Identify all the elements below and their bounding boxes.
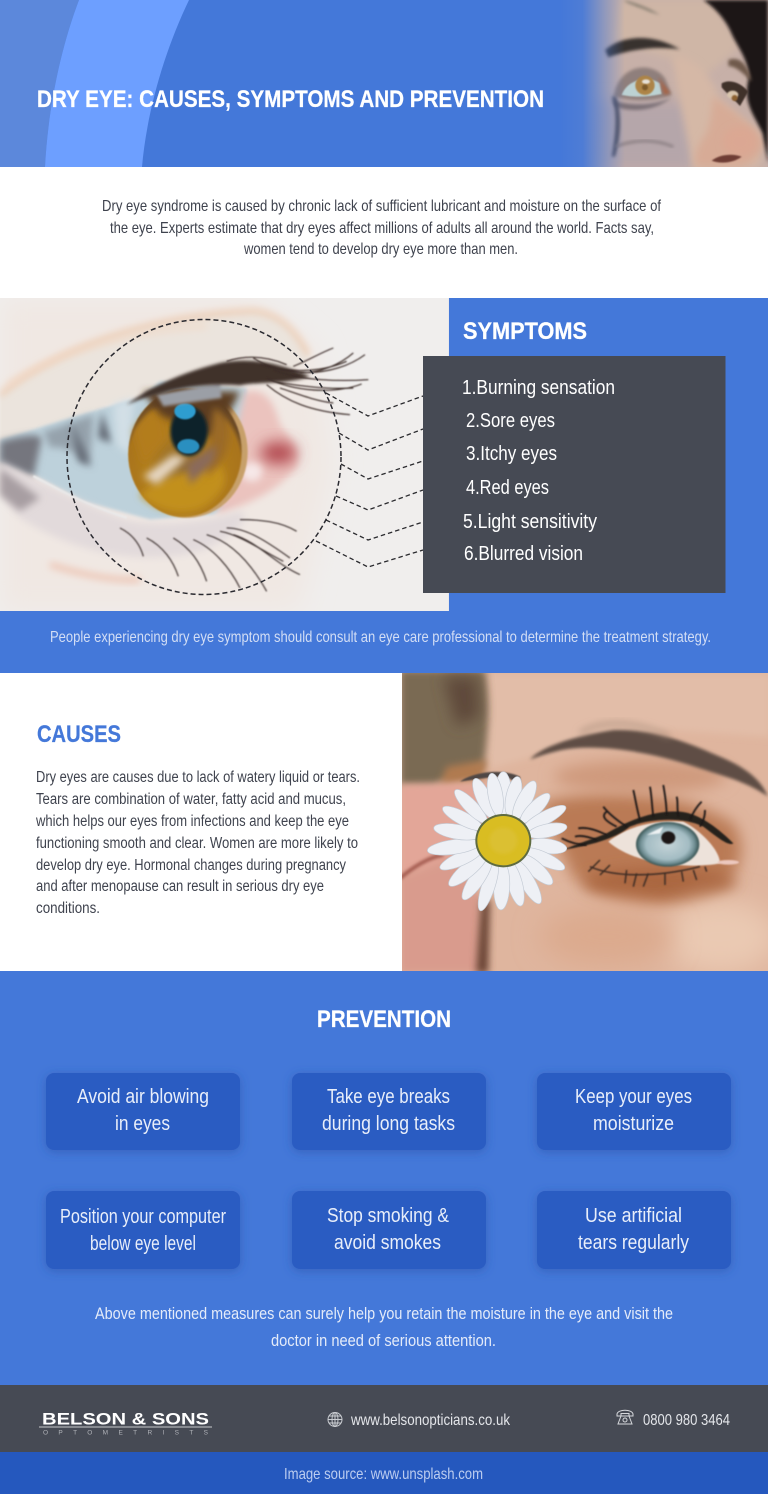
prevention closing note: doctor in need of serious attention. <box>271 1331 496 1350</box>
prevention closing note: Above mentioned measures can surely help you retain the moisture in the eye and visit the <box>95 1304 673 1323</box>
card: stop smoking: Stop smoking & <box>327 1205 450 1227</box>
symptoms list box: 3.Itchy eyes <box>466 443 557 465</box>
causes body text: Tears are combination of water, fatty acid and mucus, <box>36 791 346 808</box>
intro text: Dry eye syndrome is caused by chronic lack of sufficient lubricant and moisture on the surface of <box>102 198 661 215</box>
card: take eye breaks: during long tasks <box>322 1113 455 1135</box>
card: artificial tears <box>537 1191 731 1269</box>
photo: eye with daisy <box>400 670 768 973</box>
causes body text: conditions. <box>36 900 100 917</box>
logo <box>39 1410 212 1436</box>
dashed connectors <box>316 393 423 567</box>
symptoms heading: SYMPTOMS <box>463 318 587 345</box>
card: stop smoking: avoid smokes <box>334 1232 441 1254</box>
eye <box>608 821 720 866</box>
daisy <box>426 772 569 913</box>
causes body text: develop dry eye. Hormonal changes during pregnancy <box>36 857 346 874</box>
intro text: women tend to develop dry eye more than men. <box>243 241 518 258</box>
symptoms list box <box>423 356 726 593</box>
card: take eye breaks <box>292 1073 486 1150</box>
lower lid <box>0 461 244 558</box>
causes body text: functioning smooth and clear. Women are more likely to <box>36 835 358 852</box>
card: artificial tears: tears regularly <box>578 1232 689 1254</box>
intro text: the eye. Experts estimate that dry eyes affect millions of adults all around the world. Facts say, <box>110 220 654 237</box>
card: avoid air blowing: in eyes <box>115 1113 170 1135</box>
card: keep eyes moisturized <box>537 1073 731 1150</box>
footer: image source <box>0 1452 768 1494</box>
footer: image source: Image source: www.unsplash.com <box>284 1466 483 1483</box>
causes body text: and after menopause can result in serious dry eye <box>36 878 324 895</box>
prevention closing note <box>95 1304 673 1350</box>
card: keep eyes moisturized: moisturize <box>593 1113 674 1135</box>
website: www.belsonopticians.co.uk <box>350 1412 511 1429</box>
icon: globe <box>328 1412 342 1426</box>
causes body text: which helps our eyes from infections and keep the eye <box>35 813 349 830</box>
eyebrow <box>530 730 768 797</box>
iris <box>128 388 248 519</box>
card: position computer: below eye level <box>90 1233 196 1255</box>
causes body text <box>35 769 360 917</box>
logo: BELSON & SONS <box>42 1410 209 1428</box>
symptoms list box: 6.Blurred vision <box>464 543 583 565</box>
card: position computer <box>46 1191 240 1269</box>
card: artificial tears: Use artificial <box>585 1205 682 1227</box>
icon: telephone <box>617 1410 633 1424</box>
logo: OPTOMETRISTS <box>43 1430 209 1436</box>
panel: causes <box>35 670 768 973</box>
pink caruncle <box>217 391 297 515</box>
panel: prevention <box>0 971 768 1385</box>
footer: contact bar <box>0 1385 768 1452</box>
card: position computer: Position your computer <box>60 1206 226 1228</box>
photo: woman's face <box>578 0 768 167</box>
card: take eye breaks: Take eye breaks <box>327 1086 450 1108</box>
panel: symptoms <box>0 298 768 673</box>
causes heading: CAUSES <box>37 721 121 748</box>
dashed magnifier circle <box>67 320 341 594</box>
intro text <box>102 198 661 258</box>
title: DRY EYE: CAUSES, SYMPTOMS AND PREVENTION <box>37 86 544 113</box>
upper lid lashes <box>127 361 310 405</box>
symptoms list box: 2.Sore eyes <box>466 410 555 432</box>
causes body text: Dry eyes are causes due to lack of watery liquid or tears. <box>36 769 360 786</box>
card: stop smoking <box>292 1191 486 1269</box>
symptoms list box: 1.Burning sensation <box>462 377 615 399</box>
card: keep eyes moisturized: Keep your eyes <box>575 1086 692 1108</box>
symptoms list box: 5.Light sensitivity <box>463 511 597 533</box>
header banner <box>0 0 768 170</box>
symptoms list box: 4.Red eyes <box>466 477 549 499</box>
card: avoid air blowing: Avoid air blowing <box>77 1086 209 1108</box>
card: avoid air blowing <box>46 1073 240 1150</box>
phone number: 0800 980 3464 <box>643 1412 730 1429</box>
photo: close-up eye <box>0 298 449 611</box>
prevention heading: PREVENTION <box>317 1006 451 1033</box>
